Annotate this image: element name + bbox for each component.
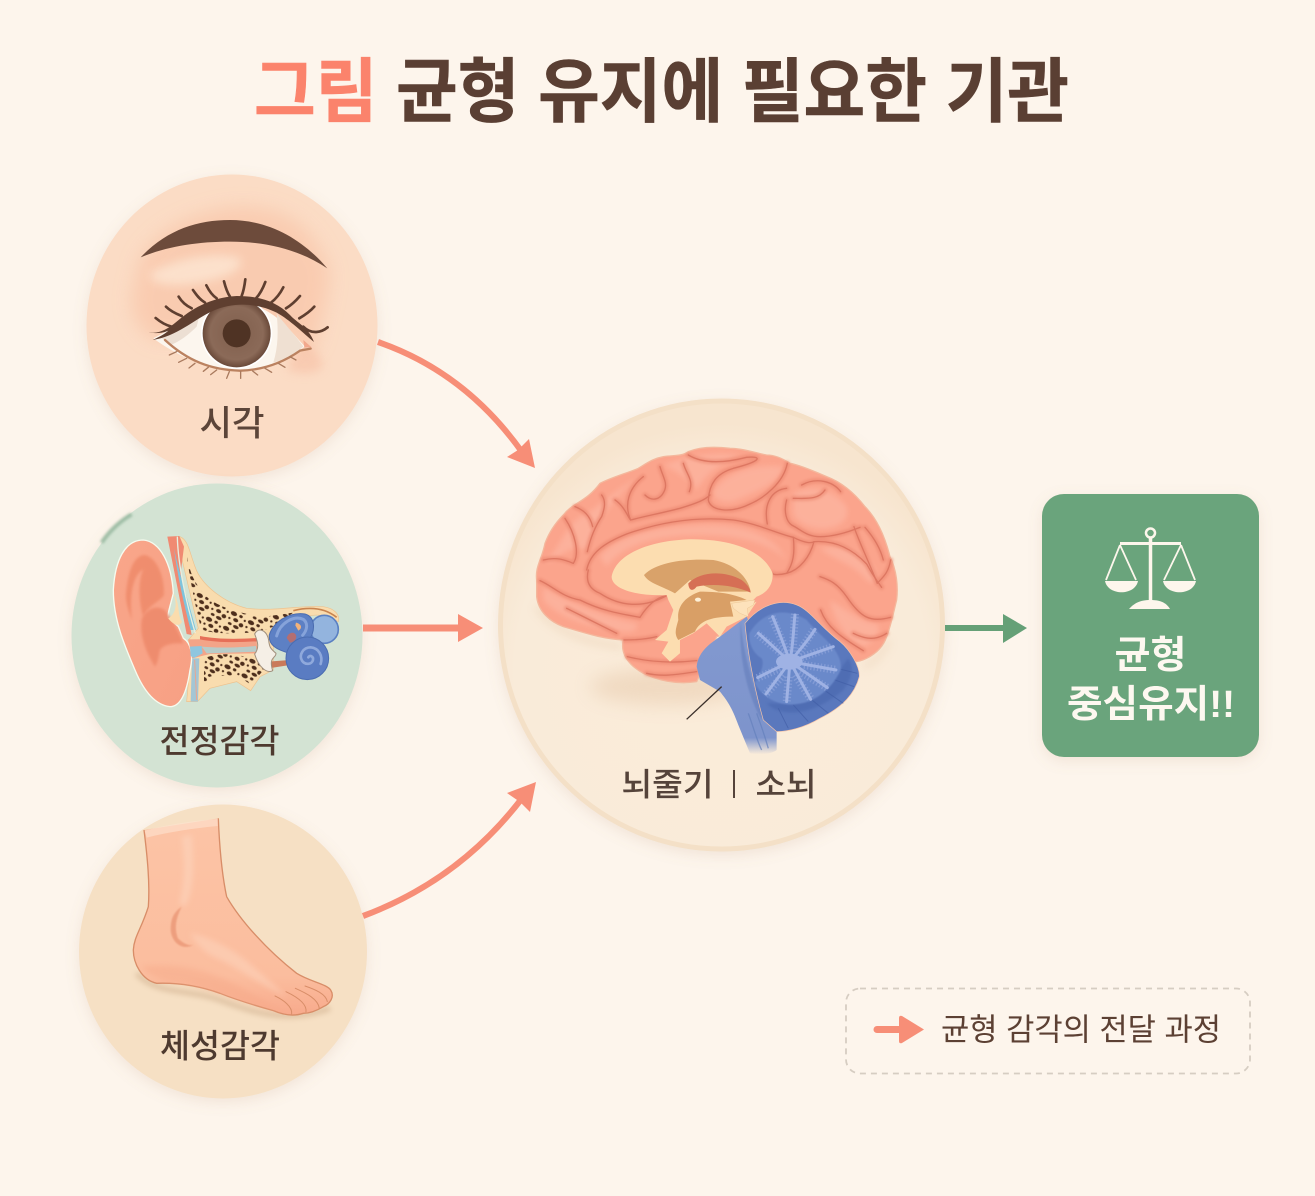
icon: foot xyxy=(133,818,332,1016)
icon: ear cross-section xyxy=(102,514,339,707)
circle: ear background xyxy=(72,484,362,788)
label: vestibular: 전정감각 xyxy=(160,722,280,760)
circle: brain background xyxy=(500,401,942,849)
corpus callosum xyxy=(612,539,773,662)
panel: vision (eye) xyxy=(86,174,378,476)
brainstem xyxy=(697,617,777,754)
arrow: somatosensory to brain xyxy=(363,782,536,916)
icon: brain sagittal section xyxy=(536,447,897,754)
bone xyxy=(177,537,339,702)
title: 그림 균형 유지에 필요한 기관 xyxy=(254,53,1069,131)
label: brainstem: 뇌줄기 xyxy=(622,766,714,802)
legend text: 균형 감각의 전달 과정 xyxy=(941,1012,1221,1048)
panel: vestibular (ear) xyxy=(72,484,362,788)
panel: somatosensory (foot) xyxy=(79,804,367,1098)
text: maintain center: 중심유지!! xyxy=(1067,684,1235,726)
arrow: brain to balance xyxy=(945,614,1027,643)
inner ear: cochlea and canals xyxy=(269,614,338,680)
icon: legend arrow xyxy=(877,1016,924,1043)
cerebellum xyxy=(745,602,859,732)
card background xyxy=(1042,494,1259,757)
pointer line xyxy=(687,687,722,719)
icon: balance scale xyxy=(1105,528,1196,609)
arrow: vestibular to brain xyxy=(363,614,483,642)
label: cerebellum: 소뇌 xyxy=(756,766,816,802)
auricle xyxy=(113,540,192,707)
circle: eye background xyxy=(86,174,378,476)
legend xyxy=(846,988,1250,1074)
cerebrum xyxy=(536,447,897,683)
skin strip xyxy=(167,536,192,635)
thalamus region xyxy=(644,560,751,593)
label: somatosensory: 체성감각 xyxy=(160,1028,280,1064)
canal xyxy=(188,639,257,658)
circle: foot background xyxy=(79,804,367,1098)
legend frame xyxy=(846,988,1250,1074)
panel: brain xyxy=(500,401,942,849)
arrow: vision to brain xyxy=(378,342,535,468)
label: vision: 시각 xyxy=(200,404,264,444)
divider xyxy=(733,770,735,798)
ossicles xyxy=(255,630,276,671)
panel: balance result xyxy=(1042,494,1259,757)
text: balance: 균형 xyxy=(1114,635,1186,677)
icon: eye and eyebrow xyxy=(131,207,330,378)
